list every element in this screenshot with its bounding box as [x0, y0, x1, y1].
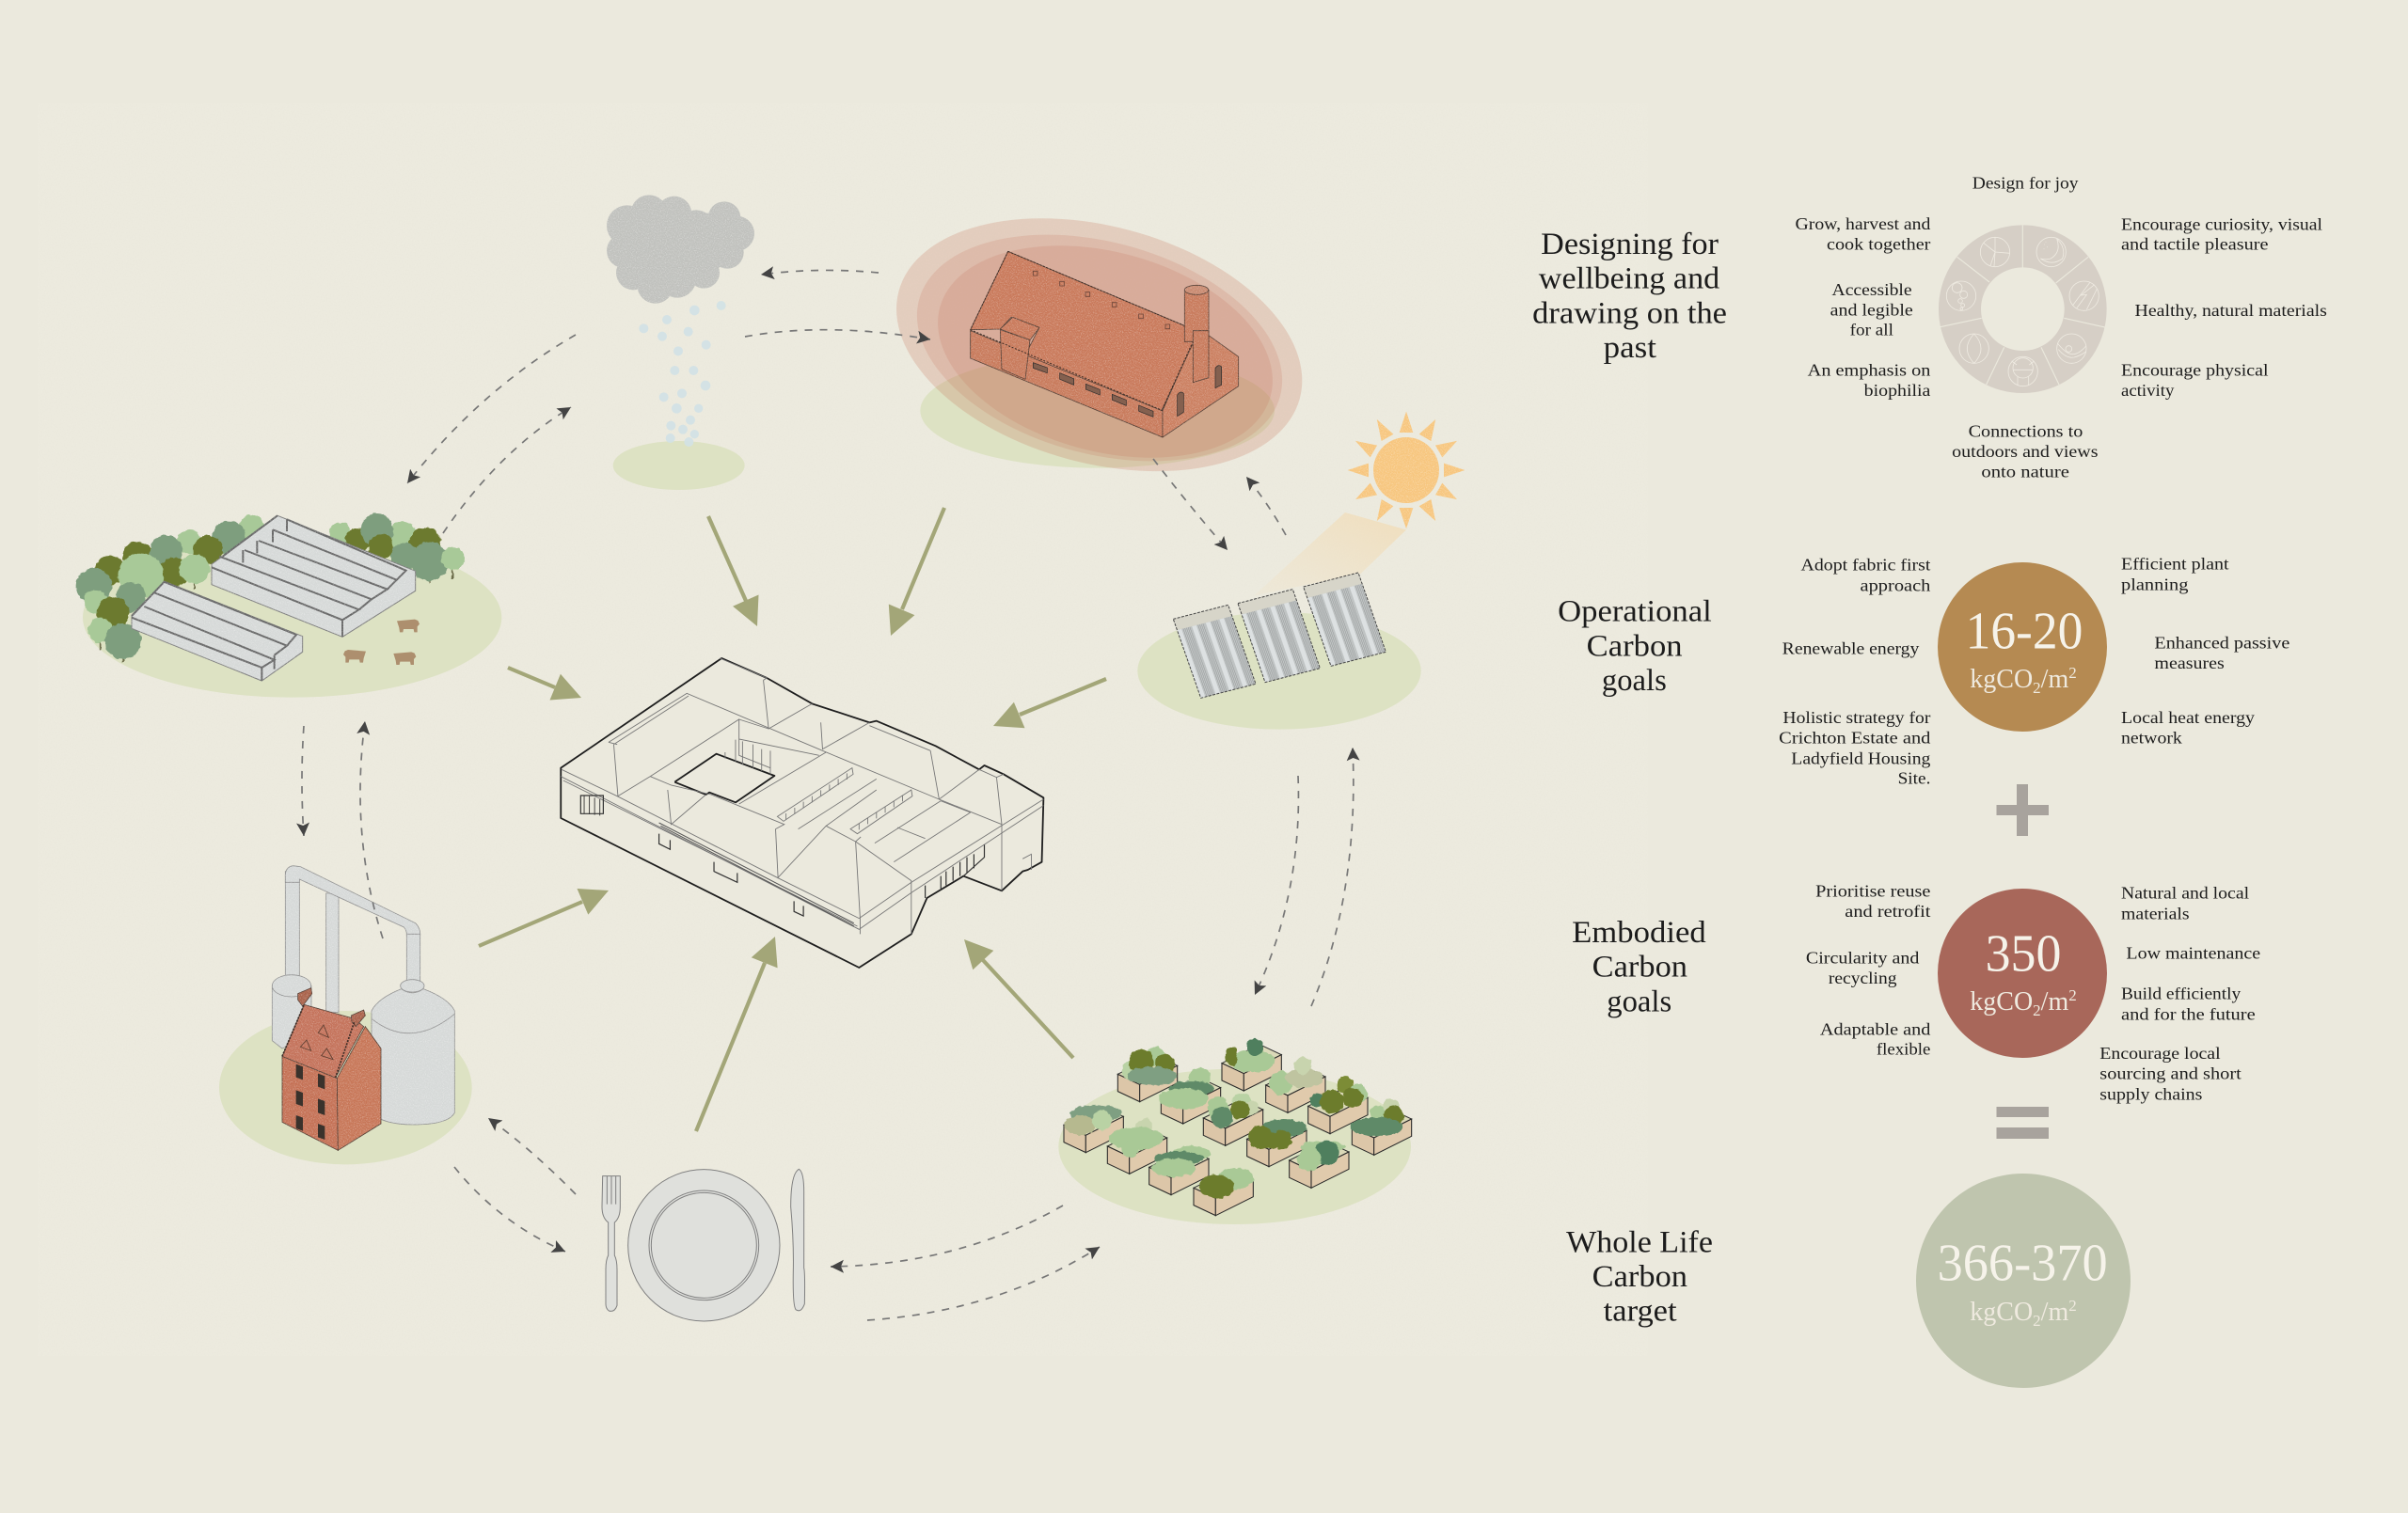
heading: operational carbon goals [1558, 595, 1712, 698]
label: physical activity: Encourage physical [2121, 360, 2269, 379]
wheel dividers [1941, 225, 2106, 385]
ground [83, 538, 501, 698]
heading: whole life carbon target: target [1604, 1295, 1677, 1329]
label: heat network [2121, 708, 2255, 748]
equals sign [1996, 1107, 2049, 1139]
heading: whole life carbon target: Carbon [1592, 1260, 1687, 1294]
knife [791, 1169, 805, 1311]
label: connections: outdoors and views [1952, 442, 2098, 461]
eaves and windows [580, 796, 1031, 926]
operational carbon circle: 2 [2068, 664, 2077, 682]
brick house [282, 988, 381, 1150]
ground [613, 441, 745, 490]
label: reuse and retrofit: and retrofit [1845, 902, 1930, 921]
embodied carbon circle: kgCO [1970, 987, 2033, 1017]
whole life carbon circle: /m [2041, 1298, 2068, 1327]
label: heat network: network [2121, 729, 2182, 748]
embodied carbon circle: 2 [2068, 986, 2077, 1004]
whole life carbon circle [1916, 1174, 2131, 1388]
label: plant planning [2121, 555, 2229, 593]
cows [343, 620, 420, 665]
wheel ring [1939, 225, 2107, 393]
trees [76, 513, 465, 662]
illustration: greenhouses with trees and cows [76, 513, 501, 698]
barn [971, 251, 1239, 437]
label: accessible: for all [1850, 321, 1893, 339]
label: physical activity: activity [2121, 381, 2174, 400]
house windows [296, 1064, 325, 1140]
label: build efficiently: Build efficiently [2121, 985, 2241, 1003]
fork [602, 1176, 620, 1311]
label: physical activity [2121, 360, 2269, 400]
heading: whole life carbon target [1566, 1225, 1713, 1329]
house dormers [300, 1025, 333, 1060]
embodied carbon circle [1938, 889, 2107, 1058]
label: accessible [1830, 280, 1913, 339]
label: build efficiently: and for the future [2121, 1004, 2256, 1023]
label: grow harvest: cook together [1827, 235, 1930, 254]
clerestories [725, 740, 912, 834]
label: local sourcing: supply chains [2099, 1084, 2202, 1103]
label: grow harvest [1795, 214, 1930, 254]
heading: designing for wellbeing: Designing for [1541, 228, 1719, 261]
plate [628, 1170, 780, 1321]
ground [1058, 1069, 1411, 1224]
illustration: plate and cutlery [602, 1169, 805, 1321]
label: accessible: Accessible [1832, 280, 1912, 299]
heading: designing for wellbeing [1532, 228, 1727, 365]
label: biophilia: An emphasis on [1808, 360, 1930, 379]
courtyard [674, 754, 774, 802]
roof lines [561, 658, 1043, 934]
heading: operational carbon goals: Operational [1558, 595, 1712, 629]
label: connections: onto nature [1981, 463, 2069, 481]
operational carbon circle [1938, 562, 2107, 732]
label: passive measures: Enhanced passive [2154, 633, 2289, 652]
label: curiosity: and tactile pleasure [2121, 235, 2269, 254]
big arrow: food to building [696, 937, 778, 1131]
illustration: raised planter beds [1058, 1038, 1412, 1224]
label: local sourcing [2099, 1044, 2242, 1103]
heading: designing for wellbeing: wellbeing and [1539, 262, 1720, 296]
label: accessible: and legible [1830, 301, 1913, 320]
ground [219, 1011, 472, 1164]
big arrow: rain to building [708, 516, 758, 626]
dashed cycle arrows [302, 270, 1354, 1320]
embodied carbon circle: /m [2041, 987, 2068, 1017]
whole life carbon circle: 2 [2033, 1312, 2041, 1330]
big arrow: barn to building [889, 508, 944, 636]
label: fabric first: approach [1861, 575, 1930, 594]
label: reuse and retrofit [1815, 881, 1930, 921]
illustration: sun and solar panels [1137, 412, 1465, 730]
label: adaptable: flexible [1877, 1040, 1930, 1059]
small greenhouse [132, 581, 303, 681]
heading: operational carbon goals: Carbon [1587, 629, 1683, 663]
planter boxes [1064, 1045, 1412, 1216]
label: build efficiently [2121, 985, 2256, 1023]
operational carbon circle: kgCO [1970, 665, 2033, 694]
label: curiosity [2121, 214, 2322, 254]
paper texture [38, 103, 1648, 1356]
operational carbon circle: /m [2041, 665, 2068, 694]
heading: designing for wellbeing: past [1604, 331, 1656, 365]
label: heat network: Local heat energy [2121, 708, 2255, 727]
label: biophilia [1808, 360, 1930, 400]
label: renewable energy: Renewable energy [1782, 639, 1919, 658]
label: circularity [1806, 948, 1919, 987]
label: grow harvest: Grow, harvest and [1795, 214, 1930, 233]
label: natural materials: materials [2121, 904, 2190, 922]
plus sign [1996, 784, 2049, 836]
label: fabric first [1800, 556, 1930, 594]
cloud [607, 195, 754, 304]
operational carbon circle: 2 [2033, 679, 2041, 697]
heading: whole life carbon target: Whole Life [1566, 1225, 1713, 1259]
label: plant planning: Efficient plant [2121, 555, 2229, 574]
wellbeing wheel [1939, 225, 2107, 393]
big arrow: planters to building [964, 939, 1073, 1058]
heading: operational carbon goals: goals [1602, 664, 1667, 698]
label: natural materials [2121, 884, 2249, 922]
label: holistic strategy [1779, 708, 1930, 788]
label: design for joy: Design for joy [1972, 174, 2079, 193]
illustration: brick barn with heat halo [868, 177, 1330, 512]
illustration: distillery and brick house [219, 866, 472, 1164]
label: circularity: Circularity and [1806, 948, 1919, 967]
barn windows [1033, 363, 1222, 417]
heat halo [868, 177, 1330, 512]
sun beam [1254, 512, 1406, 595]
operational carbon circle: 16-20 [1966, 602, 2083, 660]
sun [1348, 412, 1465, 528]
heading: designing for wellbeing: drawing on the [1532, 296, 1727, 330]
label: biophilia: biophilia [1864, 381, 1930, 400]
label: passive measures: measures [2154, 654, 2225, 672]
wheel icons [1946, 237, 2099, 386]
big arrow: distillery to building [479, 889, 609, 946]
embodied carbon circle: 350 [1986, 925, 2062, 984]
label: connections: Connections to [1969, 421, 2083, 440]
label: adaptable: Adaptable and [1820, 1020, 1930, 1039]
embodied carbon circle: 2 [2033, 1001, 2041, 1019]
big arrow: solar to building [993, 679, 1106, 728]
label: fabric first: Adopt fabric first [1800, 556, 1930, 575]
label: local sourcing: Encourage local [2099, 1044, 2221, 1063]
label: plant planning: planning [2121, 575, 2188, 593]
label: holistic strategy: Holistic strategy for [1782, 708, 1930, 727]
label: holistic strategy: Site. [1898, 769, 1930, 788]
pipes and tanks [272, 866, 454, 1125]
plants [1064, 1038, 1403, 1198]
heading: embodied carbon goals [1572, 916, 1706, 1018]
label: curiosity: Encourage curiosity, visual [2121, 214, 2322, 233]
label: natural materials: Natural and local [2121, 884, 2249, 903]
illustration: rain cloud [607, 195, 754, 490]
barn roof details [971, 251, 1192, 411]
label: healthy materials: Healthy, natural materials [2135, 301, 2327, 320]
label: passive measures [2154, 633, 2289, 672]
whole life carbon circle: 2 [2068, 1297, 2077, 1315]
heading: embodied carbon goals: goals [1607, 985, 1671, 1018]
ground [1137, 612, 1421, 730]
label: adaptable [1820, 1020, 1930, 1059]
ground [920, 354, 1275, 468]
label: circularity: recycling [1829, 969, 1896, 987]
label: local sourcing: sourcing and short [2099, 1064, 2242, 1083]
label: holistic strategy: Ladyfield Housing [1791, 749, 1930, 767]
raindrops [639, 301, 726, 447]
large greenhouse [212, 515, 416, 637]
illustration: central building axonometric [561, 658, 1043, 968]
whole life carbon circle: kgCO [1970, 1298, 2033, 1327]
building outline [561, 658, 1043, 968]
label: holistic strategy: Crichton Estate and [1779, 729, 1930, 748]
big arrow: greenhouses to building [508, 668, 581, 700]
label: connections [1952, 421, 2098, 481]
whole life carbon circle: 366-370 [1938, 1235, 2108, 1293]
heading: embodied carbon goals: Carbon [1592, 951, 1687, 985]
heading: embodied carbon goals: Embodied [1572, 916, 1706, 950]
label: low maintenance: Low maintenance [2126, 943, 2260, 962]
solar panels [1173, 573, 1386, 698]
label: reuse and retrofit: Prioritise reuse [1815, 881, 1930, 900]
